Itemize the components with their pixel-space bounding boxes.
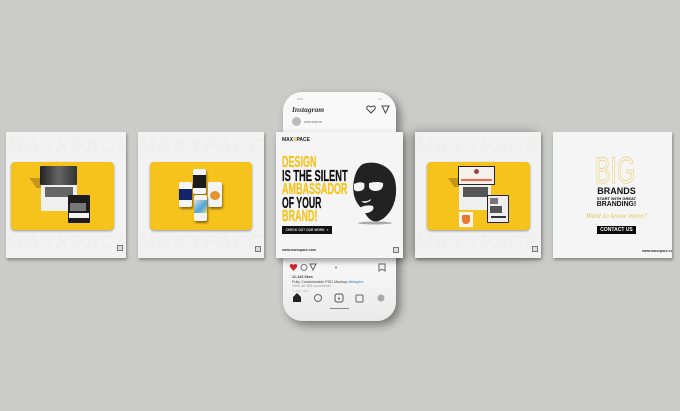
icon: tablet bbox=[68, 195, 90, 223]
status bar: 9:41 bbox=[297, 97, 303, 101]
header icons bbox=[366, 106, 390, 114]
contact button: CONTACT US bbox=[600, 227, 633, 233]
watermark: MAXXPACE bbox=[415, 231, 540, 254]
headline: BRAND! bbox=[282, 208, 317, 225]
panel: card 1 laptop bbox=[6, 132, 126, 258]
caption: 11,143 likes bbox=[292, 275, 313, 279]
logo: MAXXPACE bbox=[282, 137, 310, 143]
script line: Want to know more? bbox=[586, 211, 647, 220]
panel: card 2 phones bbox=[138, 132, 264, 258]
caption: View all 356 comments bbox=[292, 284, 331, 288]
icon: black face mask bbox=[353, 162, 396, 224]
caption: Fully Customizable PSD Mockup #inkspire bbox=[292, 280, 364, 284]
caption bbox=[292, 275, 364, 293]
status bar: ▪▪ ▪ bbox=[378, 97, 382, 101]
icon: laptop bbox=[30, 166, 77, 211]
phone bbox=[283, 92, 396, 321]
laptop base bbox=[41, 185, 77, 211]
contact button bbox=[597, 226, 636, 234]
icon: badge bbox=[459, 212, 473, 227]
tag bbox=[255, 246, 261, 252]
caption: 1 day ago bbox=[292, 288, 309, 292]
yellow panel bbox=[11, 162, 114, 230]
icon: laptop bbox=[448, 166, 495, 210]
status bar bbox=[297, 97, 382, 101]
phone top bbox=[193, 169, 206, 194]
watermark: MAXXPACE bbox=[415, 135, 540, 158]
phone left bbox=[179, 182, 192, 207]
instagram logo: Instagram bbox=[292, 105, 324, 114]
headline: AMBASSADOR bbox=[282, 181, 347, 198]
laptop base bbox=[459, 185, 491, 210]
panel: card 5 big brands bbox=[553, 132, 672, 258]
phone right bbox=[208, 182, 222, 207]
brands heading: BRANDS bbox=[597, 186, 636, 196]
tag bbox=[393, 247, 399, 253]
laptop shadow bbox=[448, 178, 468, 187]
button: CHECK OUT OUR WORK » bbox=[286, 228, 328, 232]
headline: DESIGN bbox=[282, 154, 316, 171]
headline bbox=[282, 154, 348, 225]
laptop screen bbox=[40, 166, 77, 185]
panel: center card design bbox=[276, 132, 403, 258]
icon: tablet bbox=[487, 195, 509, 223]
brands heading: START WITH GREAT bbox=[597, 196, 636, 201]
watermark: MAXXPACE bbox=[138, 135, 263, 158]
like row icons bbox=[290, 264, 386, 272]
profile row: username bbox=[304, 119, 322, 124]
yellow panel bbox=[150, 162, 252, 230]
laptop shadow bbox=[29, 178, 51, 188]
yellow panel bbox=[427, 162, 530, 230]
laptop screen bbox=[458, 166, 495, 185]
brands heading bbox=[597, 186, 636, 208]
watermark: MAXXPACE bbox=[138, 231, 263, 254]
tag bbox=[532, 246, 538, 252]
button bbox=[282, 226, 332, 234]
bottom navigation icons bbox=[293, 293, 384, 302]
home indicator bbox=[330, 308, 349, 309]
brands heading: BRANDING! bbox=[597, 201, 636, 208]
phone bottom bbox=[194, 195, 207, 221]
panel: card 4 laptop bbox=[415, 132, 541, 258]
website: www.maxxpace.com bbox=[282, 248, 316, 252]
profile row bbox=[292, 117, 322, 126]
tag bbox=[117, 245, 123, 251]
headline: OF YOUR bbox=[282, 194, 321, 212]
headline: IS THE SILENT bbox=[282, 168, 348, 184]
